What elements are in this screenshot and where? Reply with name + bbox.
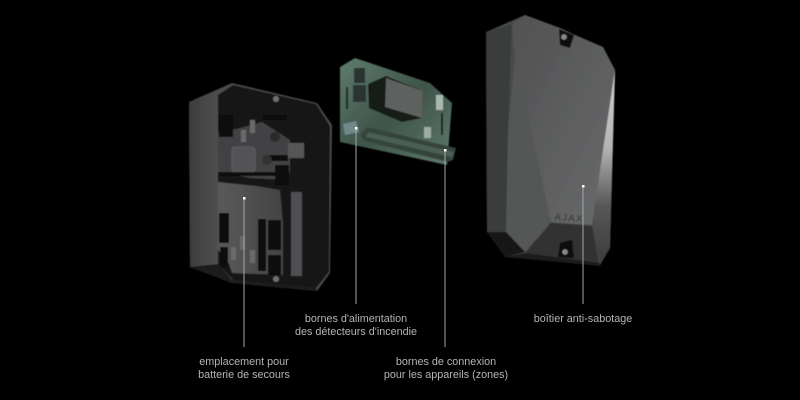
battery slot floor [218, 182, 283, 275]
label: fire detector power terminals: bornes d'alimentation [305, 313, 407, 325]
cover body [486, 15, 615, 265]
left side face [486, 24, 524, 256]
device: circuit board [340, 58, 456, 165]
label: fire detector power terminals [295, 313, 417, 338]
white sticker [436, 95, 443, 110]
top screw [561, 34, 567, 40]
relay shadow [368, 76, 423, 122]
housing interior [218, 85, 330, 288]
housing left side face [189, 93, 232, 281]
logo: AJAX [554, 212, 584, 225]
lower left facet [506, 58, 551, 252]
relay block [385, 78, 423, 118]
grey connector posts [231, 120, 304, 263]
slot [346, 87, 348, 109]
mounting plate [232, 147, 255, 172]
bottom edge [505, 253, 600, 266]
label: tamper cover: boîtier anti-sabotage [534, 313, 632, 325]
housing outer shell [189, 83, 332, 291]
label: battery slot: emplacement pour [199, 356, 289, 368]
label: fire detector power terminals: des détecteurs d'incendie [295, 326, 417, 338]
label: battery slot [198, 356, 291, 381]
leader line: tamper cover [582, 185, 584, 304]
label: battery slot: batterie de secours [198, 369, 291, 381]
dark slots [219, 115, 289, 275]
bottom screw [562, 249, 568, 255]
right highlight facet [592, 70, 615, 263]
top screw lug [559, 29, 574, 48]
bottom screw lug [558, 240, 574, 258]
power terminals [343, 121, 359, 135]
bottom left edge [487, 232, 525, 257]
transformer lower [353, 85, 366, 102]
leader line: battery [243, 197, 246, 347]
label: zone terminals: bornes de connexion [396, 356, 496, 368]
right rib [291, 192, 302, 276]
upper compartment floor [218, 122, 290, 180]
leader line: power terminals [355, 127, 358, 304]
transformer left [354, 68, 365, 83]
board [340, 58, 452, 165]
screw bosses [273, 96, 279, 102]
upper facet [512, 15, 615, 225]
device: open back housing [189, 83, 332, 291]
label: zone terminals: pour les appareils (zones) [384, 369, 508, 381]
terminal strip ridge [366, 132, 454, 157]
slot right [441, 113, 443, 135]
leader line: zone terminals [444, 149, 446, 347]
housing bottom edge [190, 264, 317, 291]
terminal strip [360, 127, 456, 162]
device: front cover [486, 15, 615, 266]
white sticker lower [424, 127, 431, 138]
label: zone terminals [384, 356, 508, 381]
bottom facet [525, 223, 599, 263]
